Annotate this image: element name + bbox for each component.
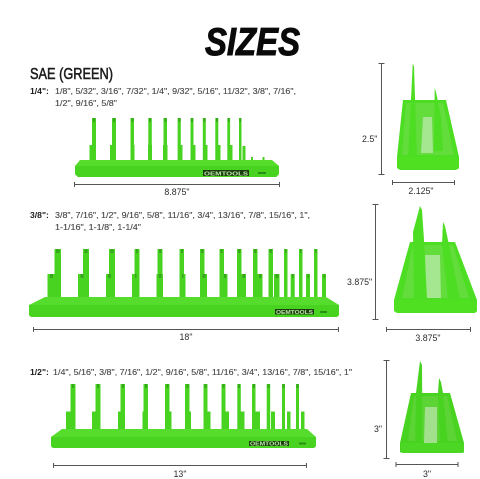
dimension: 8.875 inch	[74, 182, 280, 197]
dimension: 2.5 inch height	[362, 64, 384, 174]
dimension: 13 inch: 13"	[174, 469, 186, 479]
tray: 1/2 inch front view: OEMTOOLS	[250, 441, 289, 447]
text block: 3/8 inch sizes: 3/8":	[30, 210, 49, 220]
dimension: 3.875 inch width: 3.875"	[415, 333, 441, 343]
text block: 3/8 inch sizes: 3/8", 7/16", 1/2", 9/16", 5/8", 11/16", 3/4", 13/16", 7/8", 15/16", 1",	[55, 210, 310, 220]
side view: 1/2 inch tray	[400, 361, 464, 453]
dimension: 18 inch	[34, 327, 338, 342]
side view: 1/4 inch tray	[397, 64, 459, 170]
dimension: 3.875 inch width	[386, 327, 470, 343]
title: SIZES	[205, 21, 300, 64]
tray: 1/4 inch front view	[75, 118, 279, 177]
tray: 1/2 inch front view	[51, 384, 316, 448]
text block: 1/4 inch sizes: 1/2", 9/16", 5/8"	[55, 98, 117, 108]
dimension: 2.125 inch width	[392, 180, 454, 196]
dimension: 3 inch height	[374, 360, 390, 458]
text block: 1/4 inch sizes: 1/4":	[30, 86, 49, 96]
tray: 1/4 inch front view: OEMTOOLS	[204, 171, 248, 177]
text block: 1/2 inch sizes: 1/4", 5/16", 3/8", 7/16", 1/2", 9/16", 5/8", 11/16", 3/4", 13/16", 7/8", 15/16", 1"	[53, 367, 352, 377]
tray: 3/8 inch front view: OEMTOOLS	[276, 310, 314, 316]
dimension: 13 inch	[54, 463, 306, 479]
dimension: 18 inch: 18"	[180, 332, 192, 342]
text block: 3/8 inch sizes: 1-1/16", 1-1/8", 1-1/4"	[55, 222, 141, 232]
dimension: 3 inch width: 3"	[423, 469, 431, 479]
side view: 3/8 inch tray	[394, 206, 477, 313]
dimension: 2.125 inch width: 2.125"	[408, 186, 434, 196]
dimension: 3 inch width	[396, 462, 458, 479]
heading: SAE green: SAE (GREEN)	[30, 66, 113, 83]
dimension: 3.875 inch height	[347, 204, 378, 320]
dimension: 2.5 inch height: 2.5"	[362, 134, 377, 144]
tray: 3/8 inch front view	[29, 249, 339, 317]
dimension: 3.875 inch height: 3.875"	[347, 277, 372, 287]
text block: 1/4 inch sizes: 1/8", 5/32", 3/16", 7/32", 1/4", 9/32", 5/16", 11/32", 3/8", 7/16",	[55, 86, 296, 96]
dimension: 3 inch height: 3"	[374, 424, 382, 434]
dimension: 8.875 inch: 8.875"	[164, 187, 190, 197]
text block: 3/8 inch sizes	[30, 210, 310, 232]
text block: 1/2 inch sizes: 1/2":	[30, 367, 49, 377]
text block: 1/4 inch sizes	[30, 86, 296, 108]
